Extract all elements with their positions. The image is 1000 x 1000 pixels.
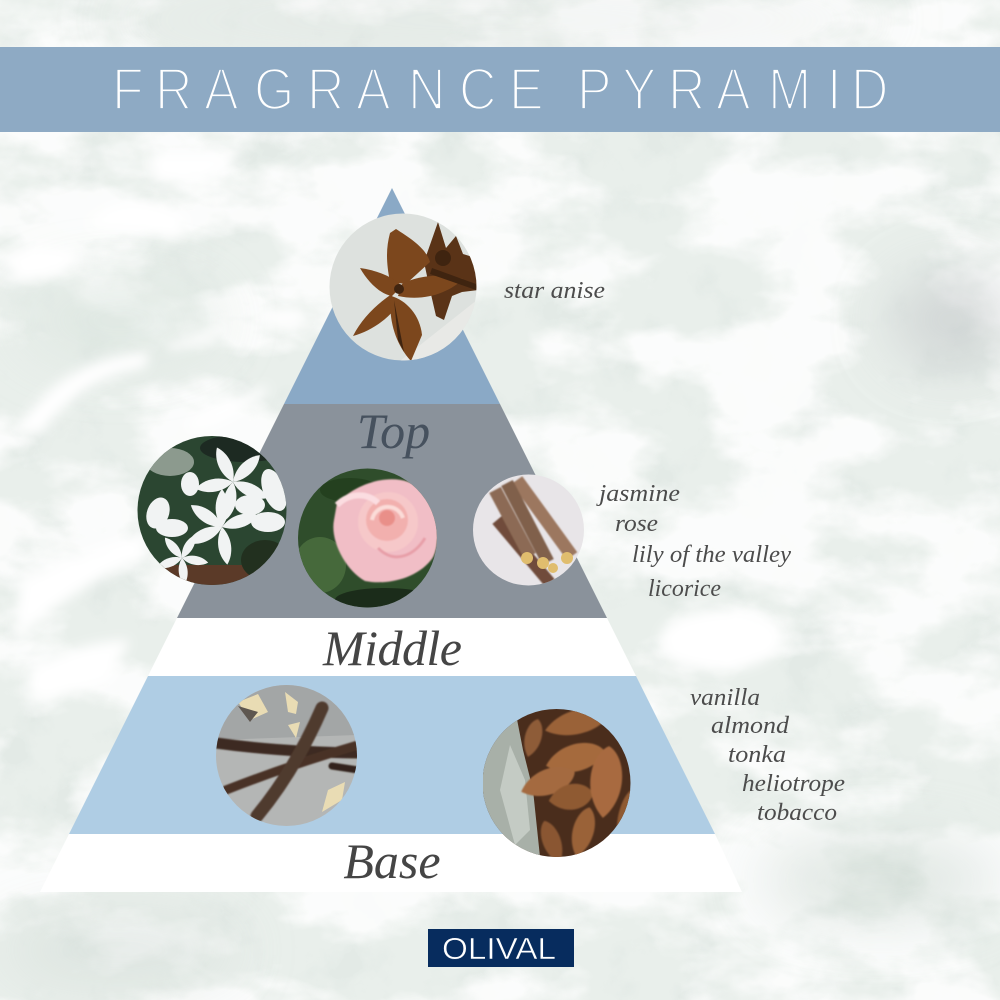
note: jasmine: jasmine <box>596 481 680 507</box>
photo: rose <box>294 468 438 612</box>
tier: base label band <box>40 834 742 892</box>
note: star anise: star anise <box>504 278 605 304</box>
photo: jasmine <box>137 434 292 590</box>
label: Top: Top <box>357 403 430 459</box>
pyramid <box>40 188 742 892</box>
photo: licorice <box>473 474 585 586</box>
note: heliotrope: heliotrope <box>742 771 845 797</box>
middle notes list <box>596 481 791 602</box>
photo: vanilla <box>216 685 358 827</box>
note: tonka: tonka <box>728 742 786 768</box>
note: lily of the valley: lily of the valley <box>632 542 791 568</box>
note: vanilla: vanilla <box>690 685 760 711</box>
title: FRAGRANCE PYRAMID <box>112 56 888 122</box>
tier: middle label band <box>148 618 636 676</box>
tier: base blue <box>69 676 715 834</box>
photo: almonds <box>483 709 630 857</box>
note: licorice: licorice <box>648 576 721 602</box>
note: tobacco: tobacco <box>757 800 837 826</box>
note: rose: rose <box>615 511 658 537</box>
label: Middle: Middle <box>322 620 462 676</box>
tier: top <box>284 188 500 404</box>
title banner <box>0 47 1000 132</box>
photo: star anise <box>329 213 478 361</box>
logo: OLIVAL: OLIVAL <box>442 931 556 966</box>
logo: OLIVAL <box>428 929 574 967</box>
note: almond: almond <box>711 713 790 739</box>
tier: middle grey <box>177 404 607 618</box>
base notes list <box>690 685 845 826</box>
label: Base: Base <box>343 833 441 889</box>
